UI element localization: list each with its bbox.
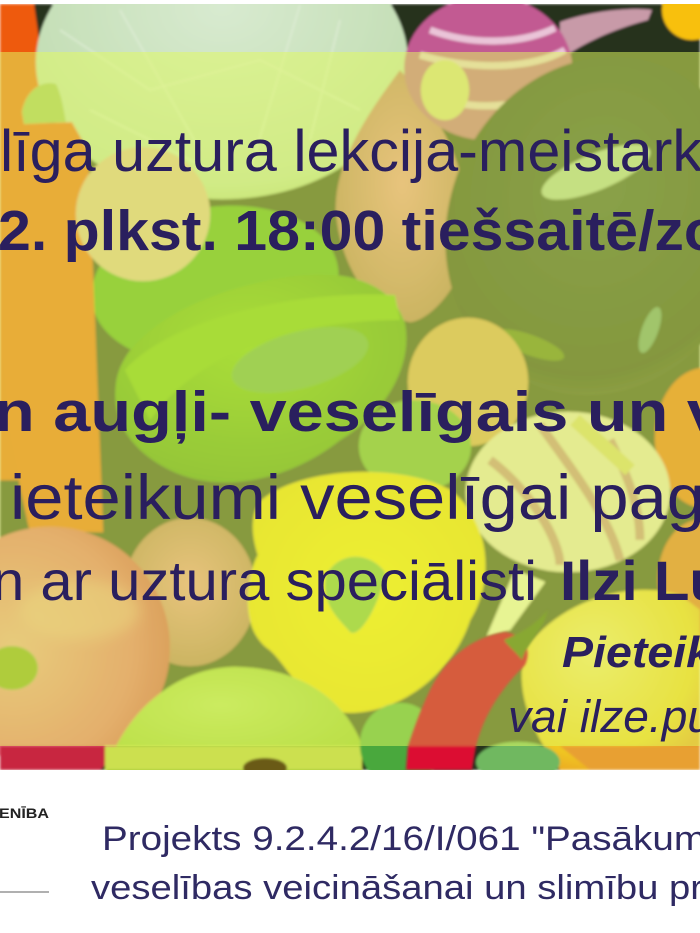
registration label: Pieteik xyxy=(562,628,700,677)
sprout bottom xyxy=(474,740,562,770)
subtitle: ieteikumi veselīgai pag xyxy=(10,463,700,533)
translucent yellow-green overlay band xyxy=(0,52,700,746)
small green xyxy=(358,702,434,770)
brussels sprout xyxy=(359,400,471,492)
yellow pepper xyxy=(248,472,485,713)
potato xyxy=(76,147,210,281)
chili pepper xyxy=(406,610,548,770)
garlic stem xyxy=(487,570,545,636)
heading line 2: date and time: 2. plkst. 18:00 tiešsaitē/zo xyxy=(0,199,700,263)
carrot main xyxy=(17,120,105,534)
green pepper front xyxy=(115,275,406,482)
garlic xyxy=(466,412,670,572)
speaker line: n ar uztura speciālisti xyxy=(0,549,537,612)
carrot behind xyxy=(0,4,40,482)
orange right xyxy=(655,368,700,508)
red apple xyxy=(0,527,170,767)
footer project text: veselības veicināšanai un slimību pr xyxy=(91,869,700,907)
green apple xyxy=(105,667,362,775)
eggplant xyxy=(444,62,700,346)
onion purple top xyxy=(560,9,652,60)
cabbage xyxy=(36,0,408,199)
yellow apple xyxy=(522,590,700,770)
footer project text: Projekts 9.2.4.2/16/I/061 "Pasākum xyxy=(102,820,700,858)
onion bottom xyxy=(408,318,528,446)
green pepper back xyxy=(92,204,340,350)
footer logo fragment: ENĪBA xyxy=(0,805,49,821)
footer logo fragment xyxy=(0,805,49,893)
heading line 1: līga uztura lekcija-meistark xyxy=(0,119,700,184)
footer project text xyxy=(91,820,700,907)
onion center xyxy=(124,518,256,666)
topic title: n augļi- veselīgais un v xyxy=(0,380,700,444)
onion left xyxy=(336,70,468,322)
yellow tomato xyxy=(662,0,700,40)
